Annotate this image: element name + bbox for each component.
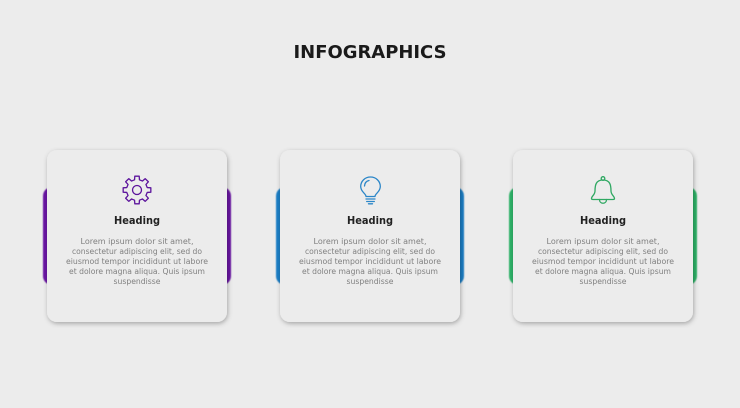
heading: Heading [114, 214, 160, 227]
accent bar purple [43, 187, 231, 285]
card surface [47, 150, 227, 322]
body text [299, 237, 441, 286]
body text: consectetur adipiscing elit, sed do [538, 247, 668, 256]
panel: card 3 green [509, 150, 697, 322]
body text: Lorem ipsum dolor sit amet, [546, 237, 660, 246]
icon: bell [592, 177, 614, 203]
body text: et dolore magna aliqua. Quis ipsum [69, 267, 205, 276]
body text: eiusmod tempor incididunt ut labore [532, 257, 674, 266]
body text: suspendisse [580, 277, 627, 286]
icon: light bulb [361, 177, 380, 204]
body text [66, 237, 208, 286]
body text: et dolore magna aliqua. Quis ipsum [535, 267, 671, 276]
accent bar blue [276, 187, 464, 285]
card surface [513, 150, 693, 322]
body text: et dolore magna aliqua. Quis ipsum [302, 267, 438, 276]
body text: Lorem ipsum dolor sit amet, [314, 237, 426, 246]
panel: card 2 blue [276, 150, 464, 322]
icon: gear [123, 176, 151, 204]
card surface [280, 150, 460, 322]
accent bar green [509, 187, 697, 285]
body text [532, 237, 674, 286]
body text: suspendisse [114, 277, 161, 286]
body text: eiusmod tempor incididunt ut labore [299, 257, 441, 266]
heading: Heading [580, 214, 626, 227]
body text: suspendisse [346, 277, 394, 286]
body text: Lorem ipsum dolor sit amet, [80, 237, 194, 246]
title: INFOGRAPHICS [294, 42, 446, 63]
heading: Heading [347, 214, 393, 227]
body text: consectetur adipiscing elit, sed do [305, 247, 435, 256]
body text: consectetur adipiscing elit, sed do [72, 247, 202, 256]
panel: card 1 purple [43, 150, 231, 322]
body text: eiusmod tempor incididunt ut labore [66, 257, 208, 266]
